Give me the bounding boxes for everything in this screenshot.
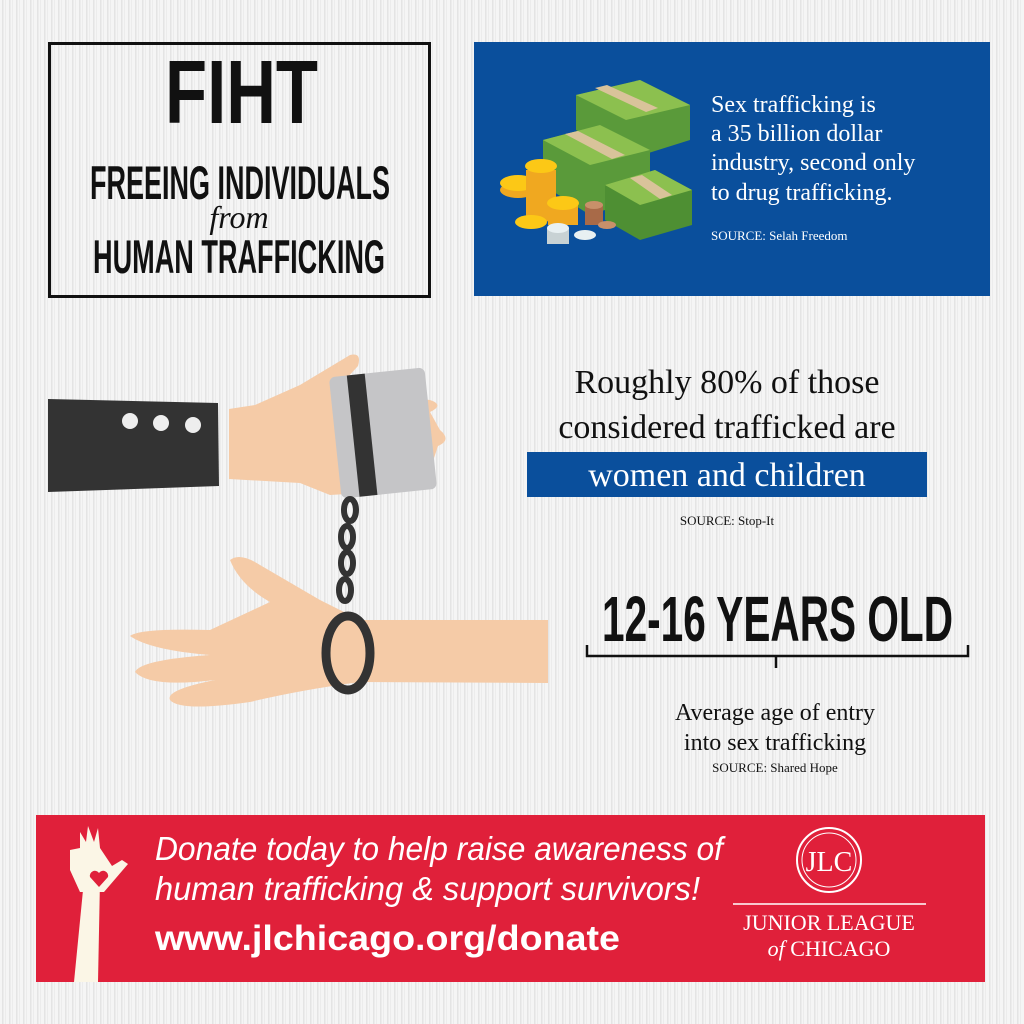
stat: age of entry (587, 583, 968, 775)
stat: 80% women and children: considered trafficked are (558, 409, 896, 446)
donate text (154, 830, 727, 958)
panel: donate banner (36, 815, 985, 982)
bracket (587, 645, 968, 668)
stat: age of entry: SOURCE: Shared Hope (712, 760, 838, 775)
logo: Junior League of Chicago: of CHICAGO (768, 936, 890, 961)
money stat text: SOURCE: Selah Freedom (711, 228, 848, 243)
money stat text: industry, second only (711, 150, 915, 176)
money stat text: to drug trafficking. (711, 180, 893, 206)
donate text: human trafficking & support survivors! (155, 870, 700, 907)
highlight (527, 452, 927, 497)
title box (50, 43, 430, 296)
stat: 80% women and children: Roughly 80% of those (574, 364, 880, 401)
stat: 80% women and children: SOURCE: Stop-It (680, 513, 775, 528)
icon: money stacks (500, 80, 692, 244)
subtitle script: from: from (209, 199, 269, 235)
money stat text: a 35 billion dollar (711, 121, 882, 147)
logo: Junior League of Chicago (733, 828, 926, 961)
icon: raised hand with heart (70, 826, 128, 982)
coins (500, 182, 536, 198)
donate text: Donate today to help raise awareness of (155, 830, 727, 867)
stat: age of entry: Average age of entry (675, 700, 875, 726)
panel: money stat (474, 42, 990, 296)
card (329, 367, 437, 499)
title: FIHT: FIHT (165, 43, 318, 143)
subtitle line 1: FREEING INDIVIDUALS (90, 156, 390, 209)
upper hand (229, 354, 446, 495)
chain (339, 499, 356, 601)
subtitle line 2: HUMAN TRAFFICKING (93, 230, 385, 283)
donate text: www.jlchicago.org/donate (154, 919, 620, 958)
illustration: handcuffed hands with card (48, 354, 548, 707)
stat: 80% women and children (527, 364, 927, 528)
money stat text: Sex trafficking is (711, 92, 876, 118)
logo: Junior League of Chicago: JLC (806, 847, 852, 878)
cuff (326, 616, 370, 690)
highlight: women and children (588, 457, 866, 494)
stat: age of entry: into sex trafficking (684, 730, 866, 756)
lower arm (130, 557, 548, 707)
money stat text (711, 92, 915, 243)
sleeve (48, 399, 219, 492)
logo: Junior League of Chicago: JUNIOR LEAGUE (743, 910, 915, 935)
